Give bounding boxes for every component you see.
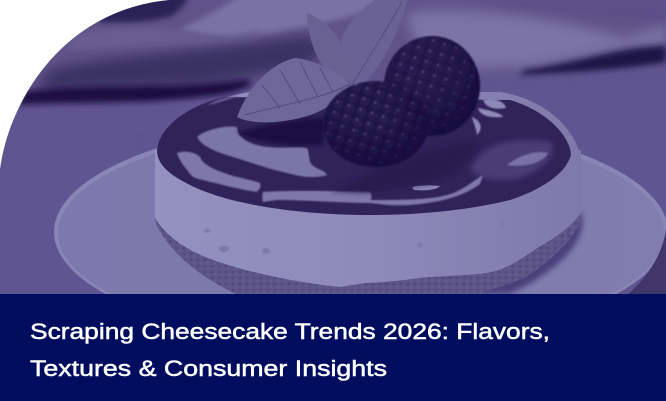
glaze shadow	[237, 118, 325, 145]
small reflections right	[472, 99, 506, 135]
table surface	[0, 0, 666, 294]
cake top rim	[228, 92, 578, 150]
glaze	[157, 96, 571, 215]
mint leaves	[237, 0, 408, 122]
glaze mid tone	[470, 140, 553, 180]
cake surface pits	[204, 222, 505, 254]
title text: Scraping Cheesecake Trends 2026: Flavors,	[30, 319, 550, 344]
glaze highlights	[197, 127, 327, 177]
title text: Textures & Consumer Insights	[30, 356, 387, 381]
fabric backdrop	[0, 0, 666, 182]
crust	[155, 213, 581, 296]
cheesecake body	[155, 150, 581, 296]
front raspberry	[323, 81, 429, 167]
back raspberry	[384, 36, 480, 136]
title text	[30, 319, 550, 381]
title banner	[0, 294, 666, 401]
plate	[54, 148, 666, 294]
